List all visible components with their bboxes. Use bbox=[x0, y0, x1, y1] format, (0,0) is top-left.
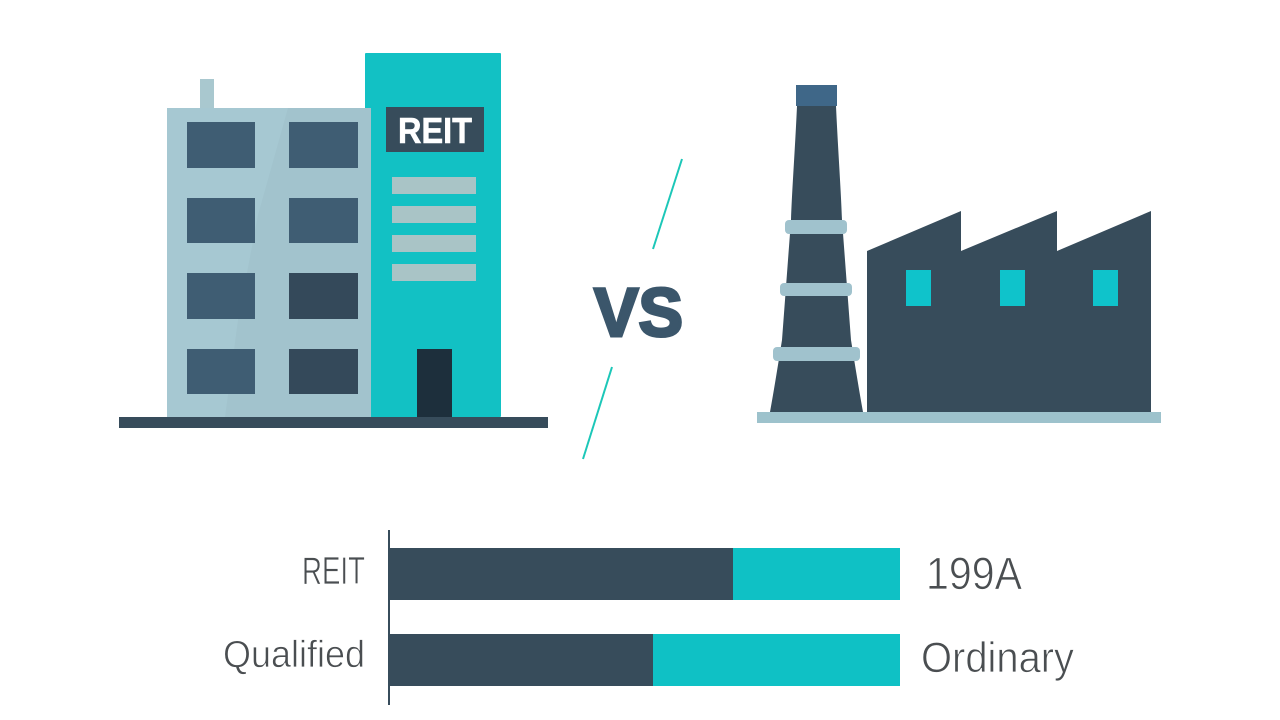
ground line bbox=[119, 417, 548, 428]
chimney rings bbox=[773, 220, 860, 361]
VS label: VS bbox=[594, 274, 683, 351]
axis bbox=[388, 530, 390, 705]
icon: REIT office building bbox=[119, 53, 548, 428]
label: REIT: REIT bbox=[302, 550, 365, 593]
building windows bbox=[187, 122, 358, 394]
VS divider bbox=[583, 159, 683, 459]
upper slash bbox=[653, 159, 682, 249]
label: Qualified: Qualified bbox=[223, 634, 365, 676]
factory hall bbox=[867, 211, 1151, 412]
bar: Qualified / Ordinary bbox=[389, 634, 900, 686]
grey building block bbox=[167, 108, 371, 417]
chimney bbox=[770, 106, 863, 412]
label: Ordinary: Ordinary bbox=[921, 634, 1074, 682]
icon: factory bbox=[757, 85, 1161, 423]
lower slash bbox=[583, 367, 612, 459]
tower stripes bbox=[392, 177, 476, 281]
bar chart: REIT vs Qualified bbox=[223, 530, 1074, 705]
teal tower bbox=[365, 53, 501, 417]
bar: REIT / 199A bbox=[389, 548, 900, 600]
rooftop vent bbox=[200, 79, 214, 109]
factory ground line bbox=[757, 412, 1161, 423]
factory windows bbox=[906, 270, 1118, 306]
REIT sign: REIT bbox=[398, 110, 472, 151]
label: 199A: 199A bbox=[926, 548, 1022, 599]
door bbox=[417, 349, 452, 417]
chimney cap bbox=[796, 85, 837, 106]
